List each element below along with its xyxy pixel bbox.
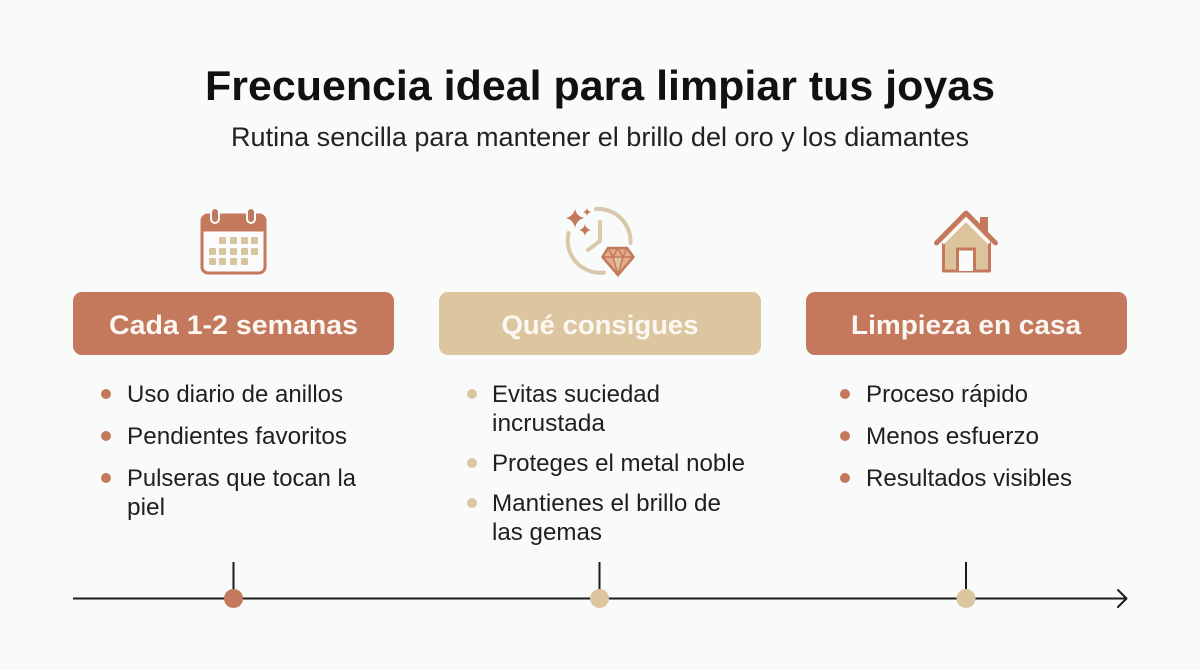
list: Qué consigues: las gemas [492,519,602,546]
title: Frecuencia ideal para limpiar tus joyas [205,62,995,109]
list: Limpieza en casa: Menos esfuerzo [866,423,1039,450]
list: Qué consigues: Mantienes el brillo de [492,490,721,517]
header: Qué consigues [439,292,761,355]
header: Cada 1-2 semanas [73,292,394,355]
header: Cada 1-2 semanas: Cada 1-2 semanas [109,310,358,340]
timeline marker 2 [590,589,609,608]
timeline marker 1 [224,589,243,608]
list: Cada 1-2 semanas: Pulseras que tocan la [127,465,356,492]
header: Limpieza en casa [806,292,1127,355]
list: Qué consigues [467,381,745,546]
list: Limpieza en casa: Proceso rápido [866,381,1028,408]
list: Qué consigues: incrustada [492,410,605,437]
list: Limpieza en casa [840,381,1072,492]
timeline arrow [73,562,1126,608]
list: Cada 1-2 semanas: Pendientes favoritos [127,423,347,450]
subtitle: Rutina sencilla para mantener el brillo del oro y los diamantes [231,122,969,152]
header: Limpieza en casa: Limpieza en casa [851,310,1082,340]
list: Qué consigues: Evitas suciedad [492,381,660,408]
timeline marker 3 [956,589,976,608]
list: Limpieza en casa: Resultados visibles [866,465,1072,492]
icon: clock with diamond and sparkles [566,208,634,275]
list: Cada 1-2 semanas: Uso diario de anillos [127,381,343,408]
list: Cada 1-2 semanas: piel [127,494,165,521]
icon: house [936,213,996,271]
icon: calendar [202,208,265,273]
header: Qué consigues: Qué consigues [502,310,698,340]
list: Cada 1-2 semanas [101,381,356,521]
list: Qué consigues: Proteges el metal noble [492,450,745,477]
